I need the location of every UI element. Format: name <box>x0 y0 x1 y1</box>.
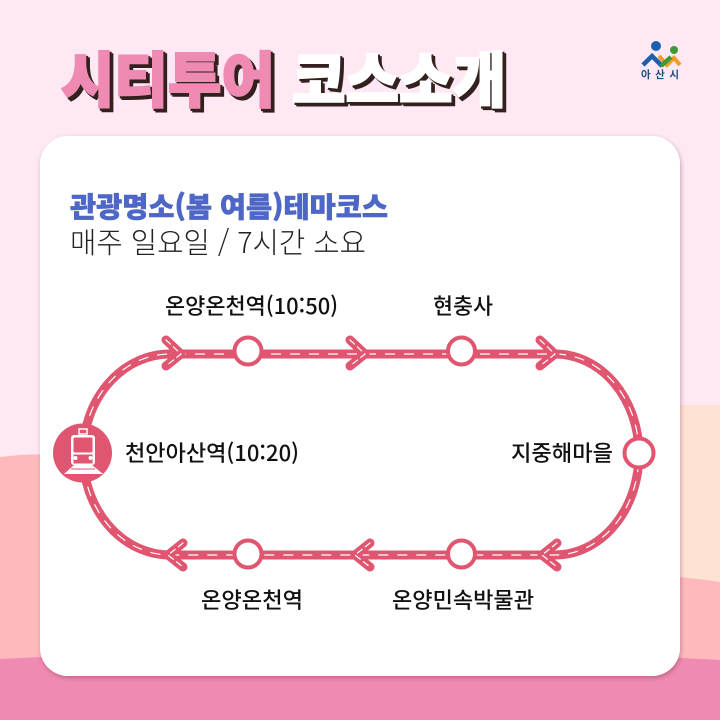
station labels <box>125 289 613 615</box>
panel: course card <box>40 136 680 676</box>
title: pink words: 시티투어 <box>61 48 275 115</box>
arrows <box>166 340 557 567</box>
course heading: 관광명소(봄 여름)테마코스 <box>70 186 388 226</box>
title: white words: 코스소개 <box>292 48 506 115</box>
station labels: 온양온천역(10:50) <box>165 289 338 321</box>
station labels: 온양민속박물관 <box>392 583 534 615</box>
station labels: 온양온천역 <box>201 583 303 615</box>
course schedule: 매주 일요일 / 7시간 소요 <box>70 220 366 262</box>
station markers <box>234 338 654 568</box>
title: white words: 코스소개 <box>294 50 508 117</box>
title: pink words: 시티투어 <box>63 50 277 117</box>
route track <box>83 340 639 567</box>
icon: train start <box>53 424 112 482</box>
title: white words: 코스소개 <box>296 52 510 118</box>
station labels: 지중해마을 <box>511 436 613 468</box>
logo: Asan city <box>641 41 680 82</box>
title: pink words: 시티투어 <box>64 52 278 118</box>
logo: Asan city: 아 산 시 <box>641 67 679 82</box>
station labels: 현충사 <box>433 289 493 321</box>
title <box>61 48 510 118</box>
station labels: 천안아산역(10:20) <box>125 436 299 468</box>
